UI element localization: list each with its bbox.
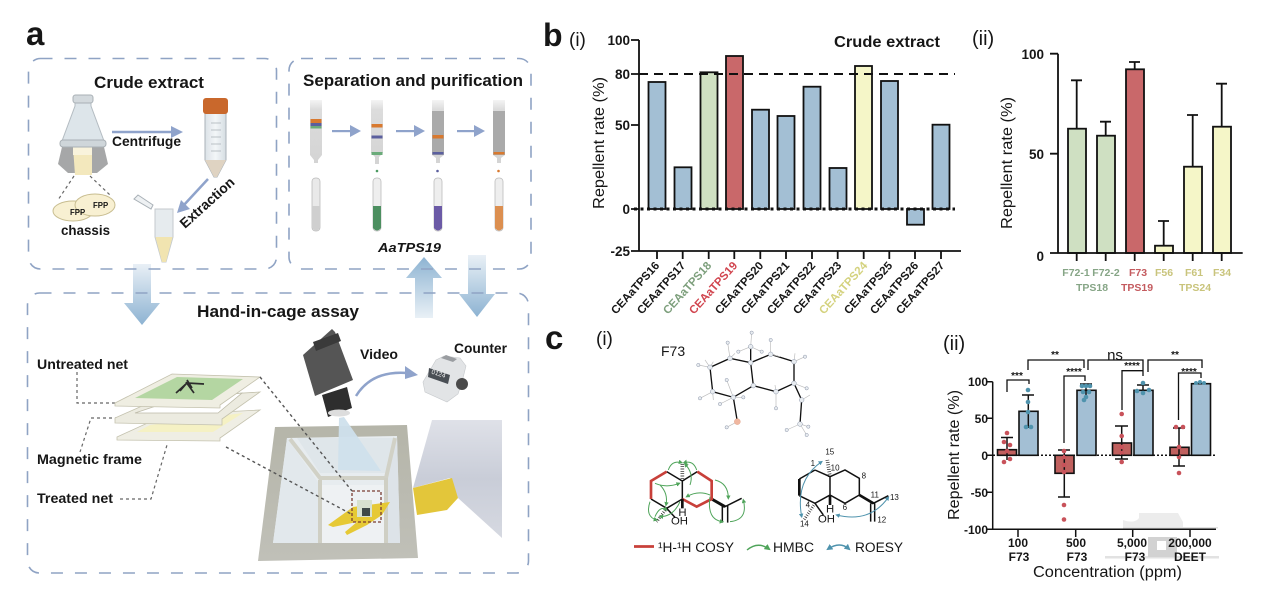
y tick labels: 100 bbox=[607, 33, 630, 48]
heading: crude extract: Crude extract bbox=[834, 34, 940, 51]
panel b bbox=[543, 17, 1243, 317]
axes bbox=[987, 382, 1216, 537]
structure with COSY and HMBC: H bbox=[678, 507, 687, 519]
x labels: TPS24 bbox=[1179, 282, 1211, 294]
significance brackets: **** bbox=[1124, 361, 1140, 372]
x labels: CEAaTPS22 bbox=[765, 260, 818, 317]
structure with ROESY and numbering: 13 bbox=[890, 493, 899, 502]
icon: yeast cells with FPP: FPP bbox=[70, 208, 85, 217]
label leader lines bbox=[77, 372, 167, 499]
x labels: 100 bbox=[1008, 536, 1028, 550]
big arrow: crude extract to assay bbox=[124, 264, 160, 325]
legend: HMBC bbox=[747, 540, 814, 555]
chart: crude extract bars bbox=[591, 33, 961, 317]
structure with ROESY and numbering: 15 bbox=[825, 447, 835, 456]
arrow: extraction bbox=[183, 179, 208, 206]
y tick labels: 0 bbox=[981, 449, 988, 463]
legend: ROESY: ROESY bbox=[855, 540, 903, 555]
layered net stack bbox=[115, 374, 260, 441]
label: F73: F73 bbox=[661, 343, 685, 359]
panel letter c: c bbox=[545, 319, 563, 356]
dashed target box bbox=[352, 491, 381, 522]
x axis title: Concentration (ppm) bbox=[1033, 564, 1182, 581]
x labels: CEAaTPS26 bbox=[868, 260, 921, 317]
y tick labels bbox=[1021, 47, 1044, 264]
column 1 bbox=[310, 100, 322, 231]
x labels: CEAaTPS25 bbox=[842, 260, 896, 317]
icon: tally counter bbox=[423, 355, 468, 402]
big arrow: assay to purification bbox=[406, 257, 442, 318]
icon: falcon tube bbox=[203, 98, 228, 177]
structure with ROESY and numbering: 8 bbox=[862, 472, 867, 481]
label: counter: Counter bbox=[454, 341, 508, 356]
x labels: F73 bbox=[1009, 550, 1030, 564]
x labels: 5,000 bbox=[1117, 536, 1147, 550]
structure with ROESY and numbering: 14 bbox=[800, 520, 809, 529]
x labels bbox=[1062, 267, 1231, 294]
label: (ii): (ii) bbox=[943, 333, 965, 355]
x labels: 200,000 bbox=[1168, 536, 1212, 550]
y tick labels: 100 bbox=[968, 375, 988, 389]
y axis title: Repellent rate (%) bbox=[999, 97, 1016, 229]
faint watermark bbox=[1105, 513, 1219, 558]
error bars bbox=[1071, 62, 1227, 245]
structure with ROESY and numbering: 1 bbox=[811, 459, 816, 468]
column 2 bbox=[371, 100, 383, 231]
y tick labels: 50 bbox=[1029, 147, 1044, 162]
icon: net on hand bbox=[357, 500, 372, 517]
significance brackets: ** bbox=[1051, 350, 1059, 361]
icon: microtube bbox=[134, 195, 173, 262]
icon: arm sleeve and glove cuff bbox=[413, 420, 502, 538]
structure with ROESY and numbering: 6 bbox=[843, 503, 848, 512]
data points blue bbox=[1024, 380, 1206, 429]
structure with ROESY and numbering bbox=[799, 447, 899, 529]
x labels: CEAaTPS21 bbox=[739, 260, 793, 317]
x labels: F34 bbox=[1213, 267, 1231, 279]
icon: tally counter: 0124 bbox=[430, 369, 447, 380]
significance brackets bbox=[1007, 347, 1202, 443]
panel letter a: a bbox=[26, 15, 45, 52]
y tick labels: 0 bbox=[1036, 249, 1044, 264]
structure with ROESY and numbering: OH bbox=[818, 514, 835, 526]
structure with ROESY and numbering: 4 bbox=[806, 500, 811, 509]
legend: HMBC: HMBC bbox=[773, 540, 814, 555]
data points red bbox=[1002, 412, 1185, 522]
significance brackets: ns bbox=[1107, 347, 1123, 364]
x labels: CEAaTPS16 bbox=[609, 260, 662, 317]
significance brackets: **** bbox=[1181, 367, 1197, 378]
y axis title: Repellent rate (%) bbox=[946, 390, 963, 520]
panel c bbox=[545, 319, 1219, 581]
x labels: F73 bbox=[1129, 267, 1147, 279]
label: AaTPS19: AaTPS19 bbox=[377, 240, 442, 255]
x labels: F73 bbox=[1067, 550, 1088, 564]
icon: flask bbox=[58, 95, 108, 175]
error bars bbox=[1001, 384, 1185, 497]
panel a bbox=[26, 15, 531, 573]
label: (i): (i) bbox=[569, 30, 586, 51]
label: (i): (i) bbox=[596, 329, 613, 350]
axes bbox=[1050, 54, 1243, 261]
x labels: F73 bbox=[1125, 550, 1146, 564]
x labels: CEAaTPS27 bbox=[894, 260, 947, 317]
x labels: CEAaTPS23 bbox=[791, 260, 844, 317]
significance brackets: **** bbox=[1066, 367, 1082, 378]
x labels: 500 bbox=[1066, 536, 1086, 550]
y tick labels: -50 bbox=[971, 486, 988, 500]
icon: yeast cells with FPP: FPP bbox=[93, 201, 108, 210]
panel: separation and purification bbox=[289, 58, 531, 269]
threshold line at 80 bbox=[639, 73, 955, 75]
heading: crude extract: Crude extract bbox=[94, 73, 204, 92]
x labels: CEAaTPS17 bbox=[635, 260, 688, 317]
y tick labels: 80 bbox=[615, 67, 630, 82]
x labels: DEET bbox=[1174, 550, 1207, 564]
zero dotted line bbox=[634, 208, 955, 210]
structure with ROESY and numbering: H bbox=[826, 504, 834, 516]
column 4 bbox=[493, 100, 505, 231]
axes bbox=[631, 40, 961, 259]
y tick labels: -25 bbox=[610, 244, 630, 259]
x labels: CEAaTPS19 bbox=[687, 260, 740, 317]
label: centrifuge: Centrifuge bbox=[112, 133, 181, 149]
dotted leader lines to cage bbox=[226, 377, 353, 515]
icon: gloved hand on cage floor bbox=[328, 502, 390, 535]
label: untreated net: Untreated net bbox=[37, 357, 129, 372]
panel letter b: b bbox=[543, 17, 563, 53]
x labels: CEAaTPS24 bbox=[817, 260, 871, 317]
label: video: Video bbox=[360, 347, 398, 362]
panel: hand-in-cage assay bbox=[28, 293, 528, 573]
big arrow: purification to assay bbox=[459, 255, 495, 317]
cage bbox=[258, 417, 418, 561]
y tick labels bbox=[607, 33, 630, 259]
chart: fraction repellent bars bbox=[999, 47, 1243, 294]
label: extraction: Extraction bbox=[176, 174, 238, 231]
purification arrows bbox=[332, 125, 485, 137]
x labels: TPS18 bbox=[1076, 282, 1108, 294]
heading: hand-in-cage assay: Hand-in-cage assay bbox=[197, 302, 360, 321]
column 3 bbox=[432, 100, 444, 231]
bars bbox=[1068, 69, 1231, 253]
y tick labels: 50 bbox=[975, 412, 988, 426]
label: magnetic frame: Magnetic frame bbox=[37, 452, 143, 467]
structure with ROESY and numbering: 12 bbox=[877, 516, 887, 525]
y axis title: Repellent rate (%) bbox=[591, 77, 608, 209]
structure with COSY and HMBC bbox=[648, 462, 744, 527]
x labels: CEAaTPS18 bbox=[661, 260, 715, 317]
icon: camera bbox=[303, 329, 353, 417]
structure with ROESY and numbering: 10 bbox=[831, 464, 840, 473]
x labels bbox=[1008, 536, 1212, 564]
structure with ROESY and numbering: 11 bbox=[871, 491, 880, 500]
x labels: F61 bbox=[1185, 267, 1203, 279]
legend: ROESY bbox=[828, 540, 903, 555]
x labels: TPS19 bbox=[1121, 282, 1153, 294]
icon: mosquito bbox=[176, 380, 204, 393]
structure with COSY and HMBC: OH bbox=[671, 515, 688, 527]
light cone bbox=[338, 417, 381, 471]
arrow: centrifuge bbox=[112, 131, 172, 133]
zero dotted line bbox=[993, 454, 1216, 456]
legend: COSY: ¹H-¹H COSY bbox=[658, 540, 734, 555]
panel: crude extract bbox=[28, 58, 276, 269]
heading: separation and purification: Separation and purification bbox=[303, 71, 523, 90]
icon: yeast cells with FPP bbox=[53, 194, 115, 221]
bars bbox=[648, 56, 950, 225]
y tick labels bbox=[964, 375, 988, 537]
arrow: video to counter bbox=[356, 373, 408, 396]
x labels: F72-2 bbox=[1092, 267, 1120, 279]
chart: concentration response bbox=[946, 347, 1219, 581]
crystal structure bbox=[697, 331, 810, 437]
legend bbox=[634, 540, 903, 555]
label: chassis: chassis bbox=[61, 222, 110, 238]
dashed lines to yeast bbox=[58, 176, 110, 200]
x labels bbox=[609, 260, 947, 317]
bars bbox=[998, 384, 1210, 473]
x labels: CEAaTPS20 bbox=[713, 260, 766, 317]
label: (ii): (ii) bbox=[972, 28, 994, 50]
significance brackets: ** bbox=[1171, 350, 1179, 361]
x labels: F72-1 bbox=[1062, 267, 1090, 279]
x labels: F56 bbox=[1155, 267, 1173, 279]
y tick labels: 50 bbox=[615, 118, 630, 133]
y tick labels: 0 bbox=[622, 202, 630, 217]
y tick labels: -100 bbox=[964, 523, 988, 537]
significance brackets: *** bbox=[1011, 371, 1023, 382]
y tick labels: 100 bbox=[1021, 47, 1044, 62]
label: treated net: Treated net bbox=[37, 491, 114, 506]
